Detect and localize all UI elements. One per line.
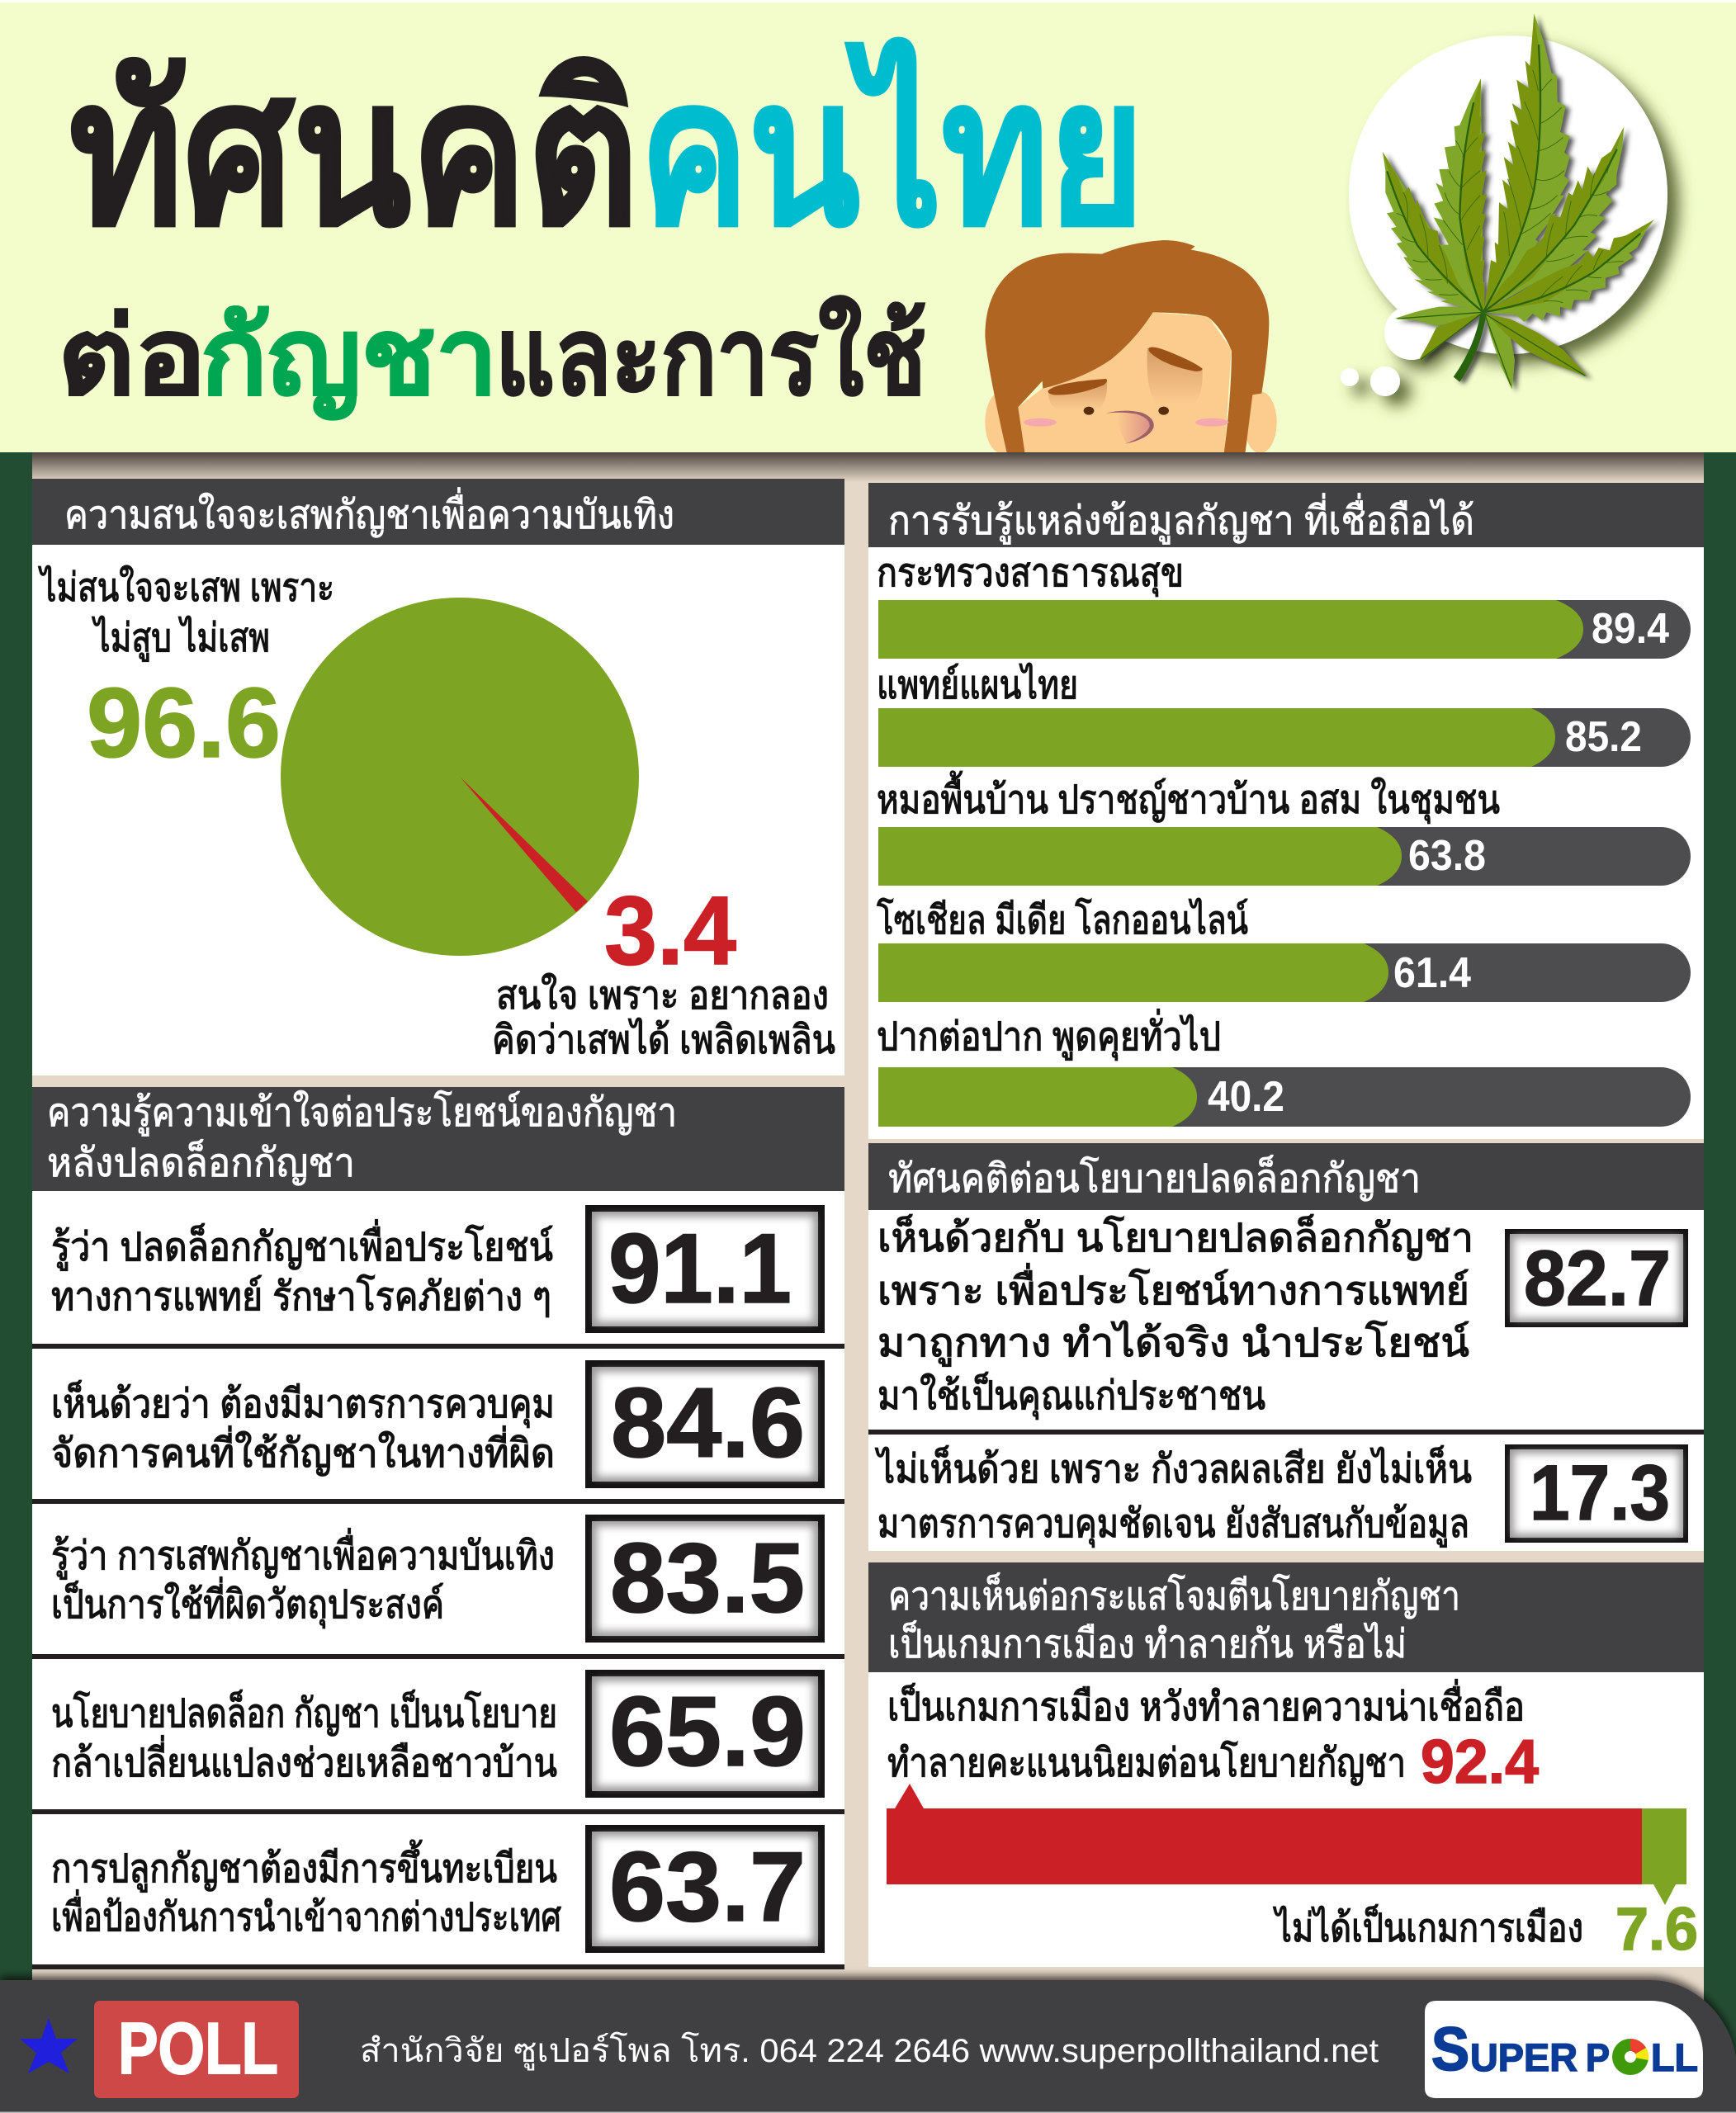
row 63.7: การปลูกกัญชาต้องมีการขึ้นทะเบียน — [51, 1840, 557, 1893]
row 91.1: ทางการแพทย์ รักษาโรคภัยต่าง ๆ — [51, 1274, 551, 1319]
agree text: มาถูกทาง ทำได้จริง นำประโยชน์ — [877, 1320, 1469, 1367]
title line 1: คนไทย — [640, 37, 1144, 266]
heading: ทัศนคติต่อนโยบายปลดล็อกกัญชา — [888, 1155, 1421, 1201]
disagree text: ไม่เห็นด้วย เพราะ กังวลผลเสีย ยังไม่เห็น — [874, 1445, 1472, 1491]
heading — [868, 1562, 1704, 1672]
panel: interest in recreational use — [32, 479, 844, 1075]
label: interested: สนใจ เพราะ อยากลอง — [496, 972, 829, 1018]
value 17.3: 17.3 — [1530, 1449, 1670, 1537]
panel: trusted information sources — [868, 483, 1704, 1139]
body background — [0, 452, 1736, 2070]
heading — [32, 479, 844, 545]
title line 2: ต่อ — [58, 296, 206, 417]
row 83.5: เป็นการใช้ที่ผิดวัตถุประสงค์ — [51, 1576, 444, 1628]
text: not political — [1273, 1896, 1698, 1963]
stacked bar — [887, 1784, 1686, 1905]
SUPER POLL logo: UPER — [1470, 2035, 1578, 2079]
row 63.7: เพื่อป้องกันการนำเข้าจากต่างประเทศ — [51, 1889, 561, 1940]
row 91.1: รู้ว่า ปลดล็อกกัญชาเพื่อประโยชน์ — [51, 1219, 553, 1271]
label: interested: 3.4 — [604, 877, 736, 986]
POLL badge: POLL — [118, 2007, 278, 2089]
text: political game — [887, 1679, 1539, 1796]
pie chart — [281, 598, 639, 956]
bar 63.8 — [877, 771, 1691, 886]
bar 40.2: ปากต่อปาก พูดคุยทั่วไป — [877, 1009, 1221, 1061]
row 84.6: จัดการคนที่ใช้กัญชาในทางที่ผิด — [51, 1425, 555, 1476]
heading: การรับรู้แหล่งข้อมูลกัญชา ที่เชื่อถือได้ — [888, 493, 1474, 545]
value 82.7: 82.7 — [1524, 1235, 1671, 1322]
text: political game: เป็นเกมการเมือง หวังทำลายความน่าเชื่อถือ — [887, 1679, 1525, 1729]
row 84.6: เห็นด้วยว่า ต้องมีมาตรการควบคุม — [51, 1380, 555, 1428]
label: not interested: ไม่สนใจจะเสพ เพราะ — [38, 565, 334, 610]
SUPER POLL logo — [1425, 2001, 1703, 2098]
bar 63.8: 63.8 — [1408, 832, 1486, 880]
panel: attitude to policy — [868, 1143, 1704, 1551]
row 65.9: นโยบายปลดล็อก กัญชา เป็นนโยบาย — [51, 1690, 557, 1736]
label: not interested — [38, 565, 334, 778]
bar 40.2 — [877, 1009, 1691, 1127]
bar 40.2: 40.2 — [1208, 1073, 1284, 1121]
bar 89.4: 89.4 — [1592, 605, 1669, 653]
text: political game: 92.4 — [1421, 1727, 1539, 1796]
heading — [32, 1087, 844, 1191]
bar 85.2 — [877, 662, 1691, 767]
text: not political: 7.6 — [1615, 1896, 1698, 1963]
bar 61.4: โซเชียล มีเดีย โลกออนไลน์ — [877, 897, 1248, 943]
text: not political: ไม่ได้เป็นเกมการเมือง — [1273, 1904, 1583, 1950]
panel: understanding of benefits — [32, 1087, 844, 1969]
disagree text — [874, 1445, 1472, 1548]
icon: thought bubble — [1341, 35, 1667, 396]
bar 85.2: แพทย์แผนไทย — [877, 662, 1078, 707]
heading: หลังปลดล็อกกัญชา — [47, 1139, 355, 1185]
row 91.1 — [32, 1205, 844, 1349]
label: not interested: 96.6 — [87, 668, 281, 778]
row 84.6 — [32, 1360, 844, 1504]
header background — [0, 2, 1736, 453]
row 83.5 — [32, 1515, 844, 1659]
row 84.6: 84.6 — [611, 1368, 805, 1478]
agree text — [877, 1214, 1473, 1420]
SUPER POLL logo: LL — [1651, 2035, 1698, 2079]
bar 61.4: 61.4 — [1393, 949, 1471, 997]
label: interested — [492, 877, 835, 1062]
agree text: มาใช้เป็นคุณแก่ประชาชน — [877, 1372, 1265, 1420]
SUPER POLL logo: P — [1586, 2035, 1610, 2079]
bar 61.4 — [877, 897, 1691, 1002]
bar 89.4 — [877, 551, 1691, 659]
heading: ความรู้ความเข้าใจต่อประโยชน์ของกัญชา — [47, 1090, 677, 1137]
heading — [868, 483, 1704, 547]
heading — [868, 1143, 1704, 1210]
row 63.7 — [32, 1825, 844, 1969]
heading: เป็นเกมการเมือง ทำลายกัน หรือไม่ — [888, 1620, 1407, 1666]
row 63.7: 63.7 — [609, 1832, 806, 1942]
icon: star — [20, 2018, 78, 2073]
title line 2: กัญชา — [201, 296, 498, 421]
title line 1: ทัศนคติ — [69, 40, 639, 266]
agree text: เห็นด้วยกับ นโยบายปลดล็อกกัญชา — [877, 1214, 1473, 1260]
icon: worried face — [985, 240, 1277, 456]
row 83.5: 83.5 — [610, 1523, 805, 1633]
title line 1 — [69, 37, 1144, 266]
row 65.9: กล้าเปลี่ยนแปลงช่วยเหลือชาวบ้าน — [51, 1735, 557, 1785]
row 91.1: 91.1 — [608, 1213, 792, 1324]
label: interested: คิดว่าเสพได้ เพลิดเพลิน — [492, 1017, 835, 1062]
row 83.5: รู้ว่า การเสพกัญชาเพื่อความบันเทิง — [51, 1528, 555, 1580]
thought bubble with cannabis leaf — [1341, 14, 1667, 396]
bar 89.4: กระทรวงสาธารณสุข — [877, 551, 1184, 597]
title line 2 — [58, 295, 926, 421]
heading: ความเห็นต่อกระแสโจมตีนโยบายกัญชา — [888, 1572, 1460, 1619]
icon: cannabis leaf — [1383, 14, 1654, 390]
label: not interested: ไม่สูบ ไม่เสพ — [92, 615, 270, 662]
contact line: สำนักวิจัย ซูเปอร์โพล โทร. 064 224 2646 www.superpollthailand.net — [360, 2032, 1379, 2070]
disagree text: มาตรการควบคุมชัดเจน ยังสับสนกับข้อมูล — [877, 1502, 1469, 1548]
title line 2: และการใช้ — [495, 295, 926, 417]
heading: ความสนใจจะเสพกัญชาเพื่อความบันเทิง — [64, 487, 674, 537]
agree text: เพราะ เพื่อประโยชน์ทางการแพทย์ — [877, 1263, 1469, 1313]
bar 63.8: หมอพื้นบ้าน ปราชญ์ชาวบ้าน อสม ในชุมชน — [877, 771, 1500, 824]
bar 85.2: 85.2 — [1565, 713, 1642, 761]
footer — [0, 1980, 1736, 2113]
text: political game: ทำลายคะแนนนิยมต่อนโยบายกัญชา — [887, 1740, 1406, 1785]
row 65.9: 65.9 — [609, 1676, 806, 1787]
row 65.9 — [32, 1670, 844, 1814]
panel: political game opinion — [868, 1562, 1704, 1967]
SUPER POLL logo: S — [1431, 2015, 1469, 2083]
